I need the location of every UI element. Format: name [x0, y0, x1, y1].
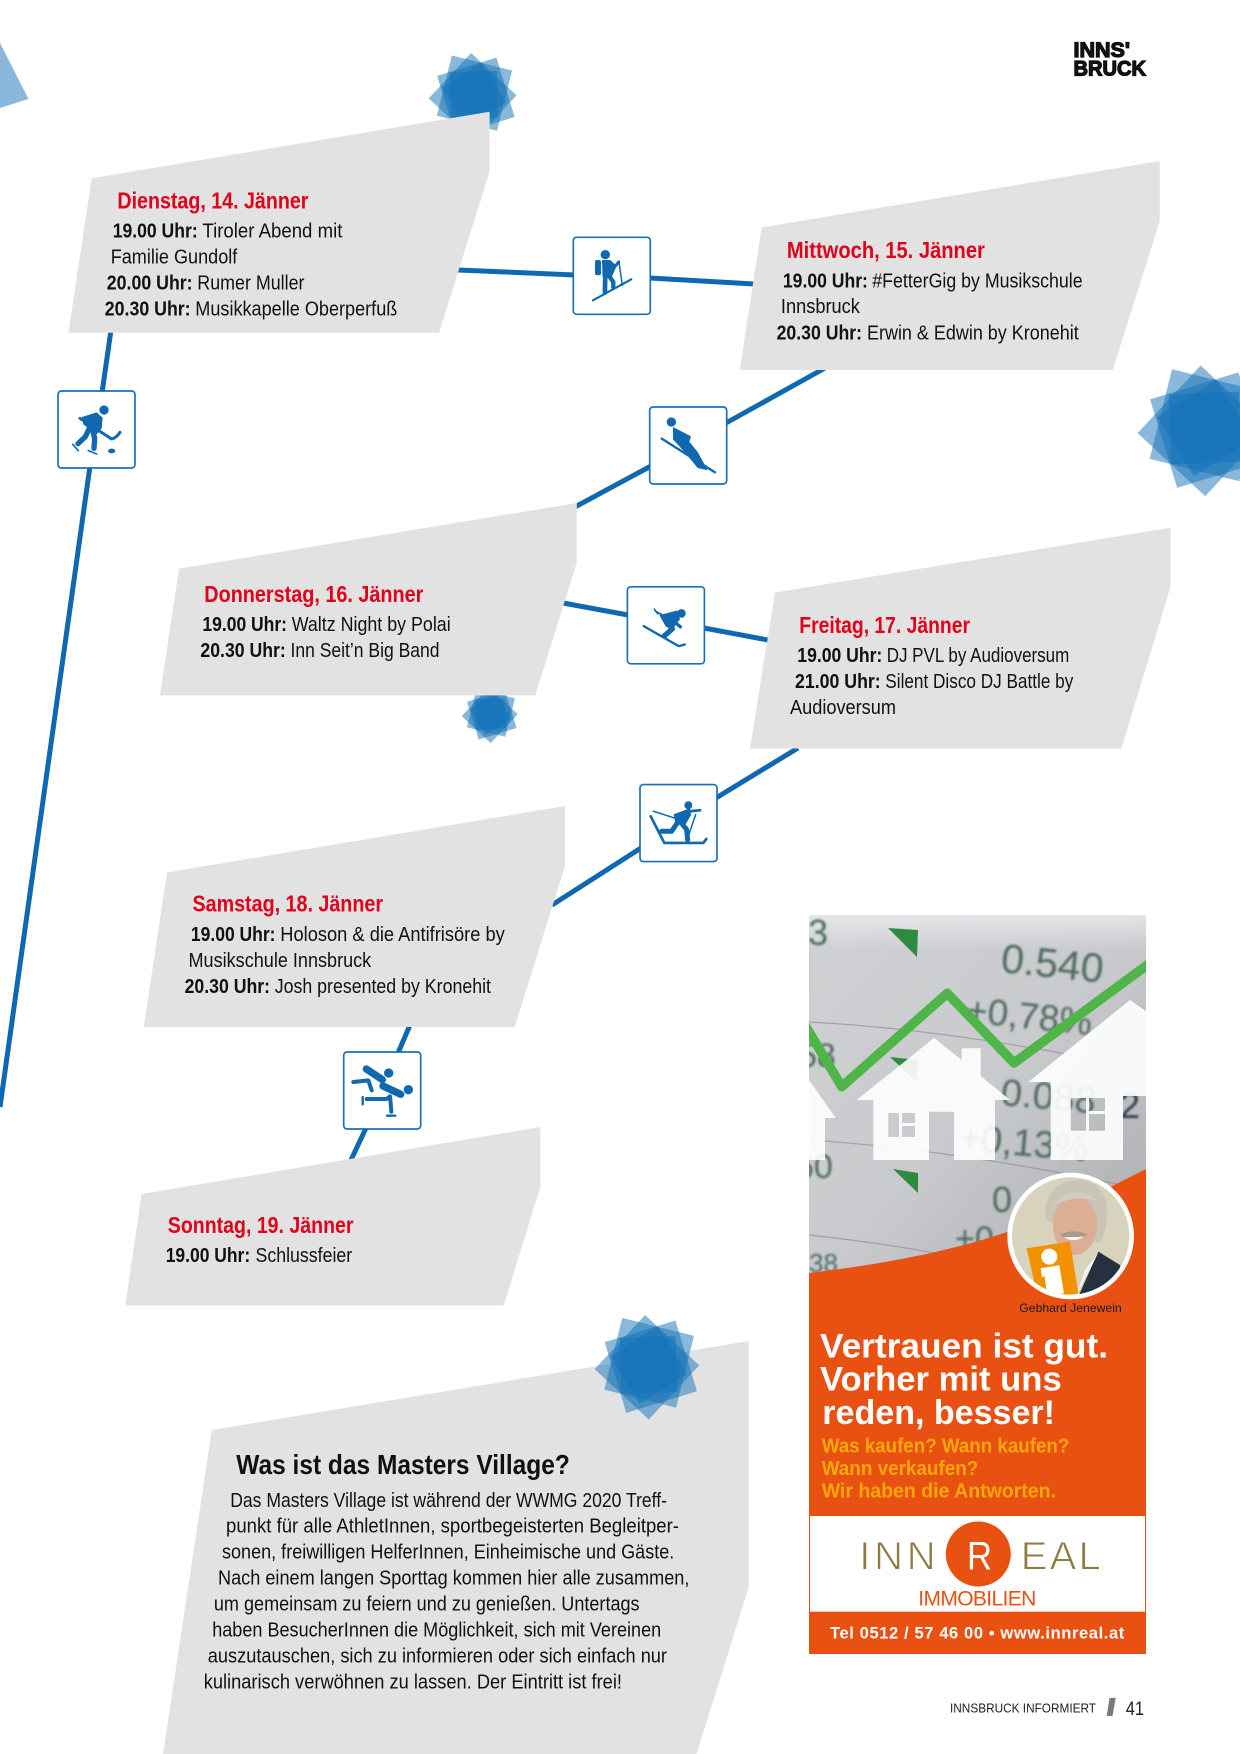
ad photo: financial table background	[795, 912, 1146, 1285]
schedule: Dienstag: 20.00 Uhr:	[107, 272, 193, 294]
heading: Masters Village: Was ist das Masters Village?	[236, 1449, 570, 1480]
body text: Masters Village: kulinarisch verwöhnen zu lassen. Der Eintritt ist frei!	[204, 1670, 622, 1694]
schedule: Samstag: 19.00 Uhr:	[191, 924, 276, 946]
ad subline: Wann verkaufen?	[822, 1458, 978, 1480]
schedule: Mittwoch: #FetterGig by Musikschule	[872, 270, 1083, 292]
ad photo: financial table background: 3	[808, 912, 828, 953]
body text: Masters Village: auszutauschen, sich zu informieren oder sich einfach nur	[208, 1644, 667, 1668]
star: right edge	[1138, 366, 1240, 496]
ad icon: houses	[809, 1000, 1150, 1160]
schedule: Dienstag: Familie Gundolf	[111, 246, 238, 268]
schedule: Mittwoch: Innsbruck	[781, 296, 861, 318]
panel: Samstag 18. Jänner	[144, 806, 565, 1027]
advertisement: Innreal Immobilien	[795, 912, 1150, 1654]
ad photo: financial table background: 38	[809, 1248, 838, 1278]
heading: Donnerstag: Donnerstag, 16. Jänner	[204, 581, 423, 607]
ad subline: Wir haben die Antworten.	[822, 1480, 1056, 1502]
ad photo: financial table background: 0.088	[999, 1072, 1098, 1122]
icon: speed skating	[344, 1052, 421, 1129]
icon: alpine skiing	[627, 587, 704, 664]
decorative triangle top left	[0, 43, 28, 108]
ad headline: Vertrauen ist gut.	[820, 1327, 1108, 1365]
ad photo: financial table background: +0,78%	[964, 989, 1094, 1043]
ad headline	[820, 1327, 1108, 1432]
body text: Masters Village	[204, 1489, 689, 1694]
heading: Sonntag: Sonntag, 19. Jänner	[168, 1212, 354, 1238]
heading: Freitag: Freitag, 17. Jänner	[799, 612, 970, 638]
ad contact line: Tel 0512 / 57 46 00 • www.innreal.at	[830, 1624, 1125, 1642]
body text: Masters Village: Das Masters Village ist während der WWMG 2020 Treff-	[230, 1489, 667, 1512]
schedule: Mittwoch: 19.00 Uhr:	[783, 270, 868, 292]
ad photo: financial table background: 60	[795, 1148, 833, 1186]
schedule: Freitag: DJ PVL by Audioversum	[887, 645, 1069, 667]
logo: Innsbruck	[1074, 39, 1146, 81]
ad subline: Was kaufen? Wann kaufen?	[822, 1436, 1069, 1458]
panel: Freitag 17. Jänner	[750, 528, 1170, 748]
schedule: Mittwoch	[777, 270, 1083, 344]
ad chart: green rising line	[805, 963, 1150, 1087]
schedule: Sonntag	[166, 1245, 352, 1267]
footer: publication name and page number: INNSBRUCK INFORMIERT	[950, 1701, 1096, 1716]
heading: Mittwoch: Mittwoch, 15. Jänner	[787, 237, 985, 263]
schedule: Dienstag: Rumer Muller	[197, 272, 305, 294]
body text: Masters Village: Nach einem langen Sporttag kommen hier alle zusammen,	[218, 1567, 689, 1590]
schedule: Mittwoch: 20.30 Uhr:	[777, 322, 862, 344]
star: below Donnerstag panel	[462, 687, 518, 743]
ad photo: financial table background: 2	[1120, 1085, 1140, 1126]
icon: ski touring	[573, 237, 650, 314]
ad headline: Vorher mit uns	[820, 1361, 1062, 1399]
body text: Masters Village: sonen, freiwilligen HelferInnen, Einheimische und Gäste.	[222, 1541, 674, 1564]
ad photo: financial table background: 0	[992, 1179, 1012, 1220]
schedule: Freitag: 19.00 Uhr:	[797, 645, 882, 667]
schedule: Sonntag: 19.00 Uhr:	[166, 1245, 250, 1267]
footer: publication name and page number	[950, 1698, 1144, 1720]
schedule: Samstag: Holoson & die Antifrisöre by	[280, 924, 505, 946]
icon: ice hockey	[58, 391, 135, 468]
schedule: Sonntag: Schlussfeier	[256, 1245, 352, 1267]
schedule: Samstag: 20.30 Uhr:	[185, 976, 270, 998]
schedule: Donnerstag: 20.30 Uhr:	[200, 640, 286, 662]
schedule: Donnerstag: Waltz Night by Polai	[292, 614, 451, 636]
schedule: Freitag: Audioversum	[790, 697, 896, 719]
schedule: Freitag: 21.00 Uhr:	[795, 671, 881, 693]
body text: Masters Village: haben BesucherInnen die Möglichkeit, sich mit Vereinen	[212, 1618, 661, 1642]
schedule: Dienstag: Musikkapelle Oberperfuß	[195, 298, 397, 320]
ad logo: Innreal Immobilien: IMMOBILIEN	[918, 1588, 1036, 1611]
ad logo: Innreal Immobilien: INN	[859, 1534, 936, 1578]
panel: Was ist das Masters Village	[163, 1341, 748, 1754]
connector lines	[0, 270, 825, 1160]
ad photo: financial table background: +0	[955, 1220, 994, 1258]
ad logo: Innreal Immobilien	[810, 1516, 1145, 1612]
body text: Masters Village: punkt für alle AthletInnen, sportbegeisterten Begleitper-	[226, 1515, 679, 1538]
body text: Masters Village: um gemeinsam zu feiern und zu genießen. Untertags	[214, 1593, 640, 1616]
ad photo: financial table background: +0,13%	[957, 1117, 1090, 1170]
footer: publication name and page number: 41	[1126, 1699, 1144, 1720]
schedule: Donnerstag: Inn Seit’n Big Band	[290, 640, 440, 662]
schedule: Donnerstag	[200, 614, 451, 662]
schedule: Donnerstag: 19.00 Uhr:	[202, 614, 287, 636]
panel: Dienstag 14. Jänner	[68, 112, 490, 333]
ad photo: financial table background: 0.540	[999, 935, 1106, 992]
ad panel: orange body	[809, 1169, 1146, 1654]
icon: cross-country skiing	[640, 785, 717, 862]
schedule: Mittwoch: Erwin & Edwin by Kronehit	[867, 322, 1079, 344]
star: top centre	[429, 53, 516, 141]
ad headline: reden, besser!	[822, 1394, 1055, 1432]
heading: Samstag: Samstag, 18. Jänner	[192, 890, 383, 916]
ad caption: portrait name: Gebhard Jenewein	[1019, 1301, 1122, 1315]
schedule: Dienstag	[105, 220, 397, 320]
heading: Dienstag: Dienstag, 14. Jänner	[117, 187, 308, 213]
schedule: Samstag	[185, 924, 505, 998]
ad logo: Innreal Immobilien: EAL	[1021, 1534, 1101, 1578]
schedule: Dienstag: 20.30 Uhr:	[105, 298, 191, 320]
panel: Donnerstag 16. Jänner	[160, 503, 577, 695]
ad portrait: Gebhard Jenewein	[1007, 1173, 1134, 1300]
schedule: Dienstag: 19.00 Uhr:	[113, 220, 198, 242]
icon: ski jumping	[650, 407, 727, 484]
schedule: Samstag: Musikschule Innsbruck	[188, 950, 372, 972]
panel: Mittwoch 15. Jänner	[740, 161, 1160, 370]
schedule: Freitag: Silent Disco DJ Battle by	[885, 671, 1073, 693]
star: over Masters Village panel	[595, 1315, 699, 1419]
schedule: Freitag	[790, 645, 1073, 719]
panel: Sonntag 19. Jänner	[125, 1127, 540, 1306]
logo: Innsbruck: BRUCK	[1074, 58, 1146, 81]
schedule: Samstag: Josh presented by Kronehit	[275, 976, 491, 998]
ad logo: Innreal Immobilien: R	[967, 1534, 992, 1578]
schedule: Dienstag: Tiroler Abend mit	[202, 220, 343, 242]
ad subline	[822, 1438, 1068, 1498]
logo: Innsbruck: INNS'	[1074, 39, 1130, 62]
ad photo: financial table background: 58	[798, 1037, 836, 1075]
